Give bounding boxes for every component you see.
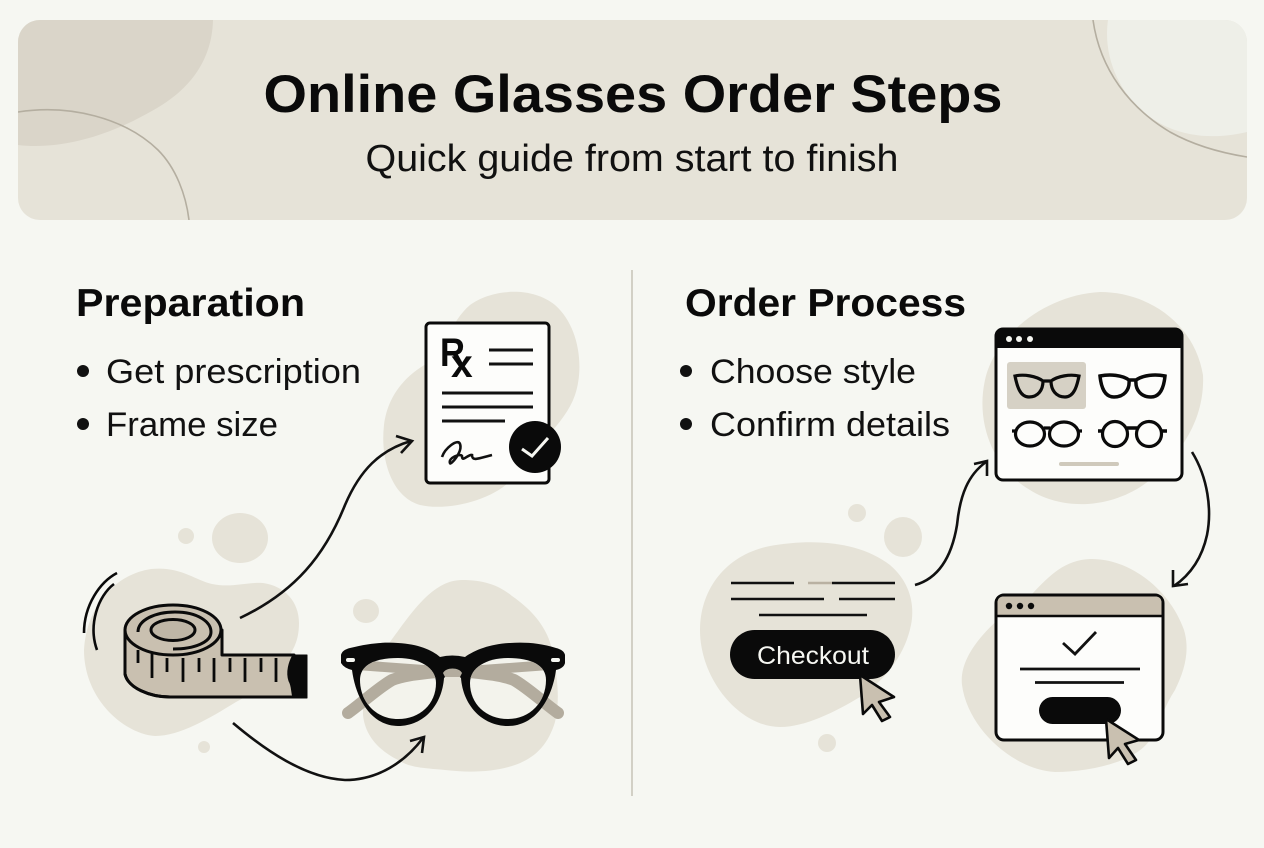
order process list: Choose style (710, 353, 916, 391)
order process list: Confirm details (710, 406, 950, 444)
icon: measuring tape (84, 573, 307, 698)
heading: preparation: Preparation (76, 282, 305, 325)
icon: prescription document: x (451, 343, 473, 386)
order process list (680, 353, 950, 444)
checkout button (730, 630, 895, 679)
icon: cursor on checkout (860, 675, 894, 721)
preparation list (77, 353, 361, 444)
arrow: tape to glasses (233, 723, 424, 780)
icon: glasses (341, 643, 565, 726)
subtitle: Quick guide from start to finish (366, 138, 898, 180)
preparation list: Get prescription (106, 353, 361, 391)
icon: confirmation window (996, 595, 1163, 740)
checkout lines (731, 583, 895, 615)
arrow: tape to prescription (240, 436, 412, 618)
icon: cursor on confirmation (1106, 719, 1139, 764)
heading: order process: Order Process (685, 282, 966, 325)
preparation list: Frame size (106, 406, 278, 444)
icon: prescription document (426, 323, 561, 483)
divider (631, 270, 633, 796)
checkout button: Checkout (757, 642, 869, 670)
title: Online Glasses Order Steps (264, 65, 1003, 124)
arrow: checkout to catalog (915, 461, 987, 585)
background blobs (84, 292, 1203, 772)
header banner (18, 20, 1247, 220)
icon: prescription document: R (440, 331, 465, 375)
arrow: catalog to confirmation (1173, 452, 1209, 586)
icon: glasses catalog window (996, 329, 1182, 480)
